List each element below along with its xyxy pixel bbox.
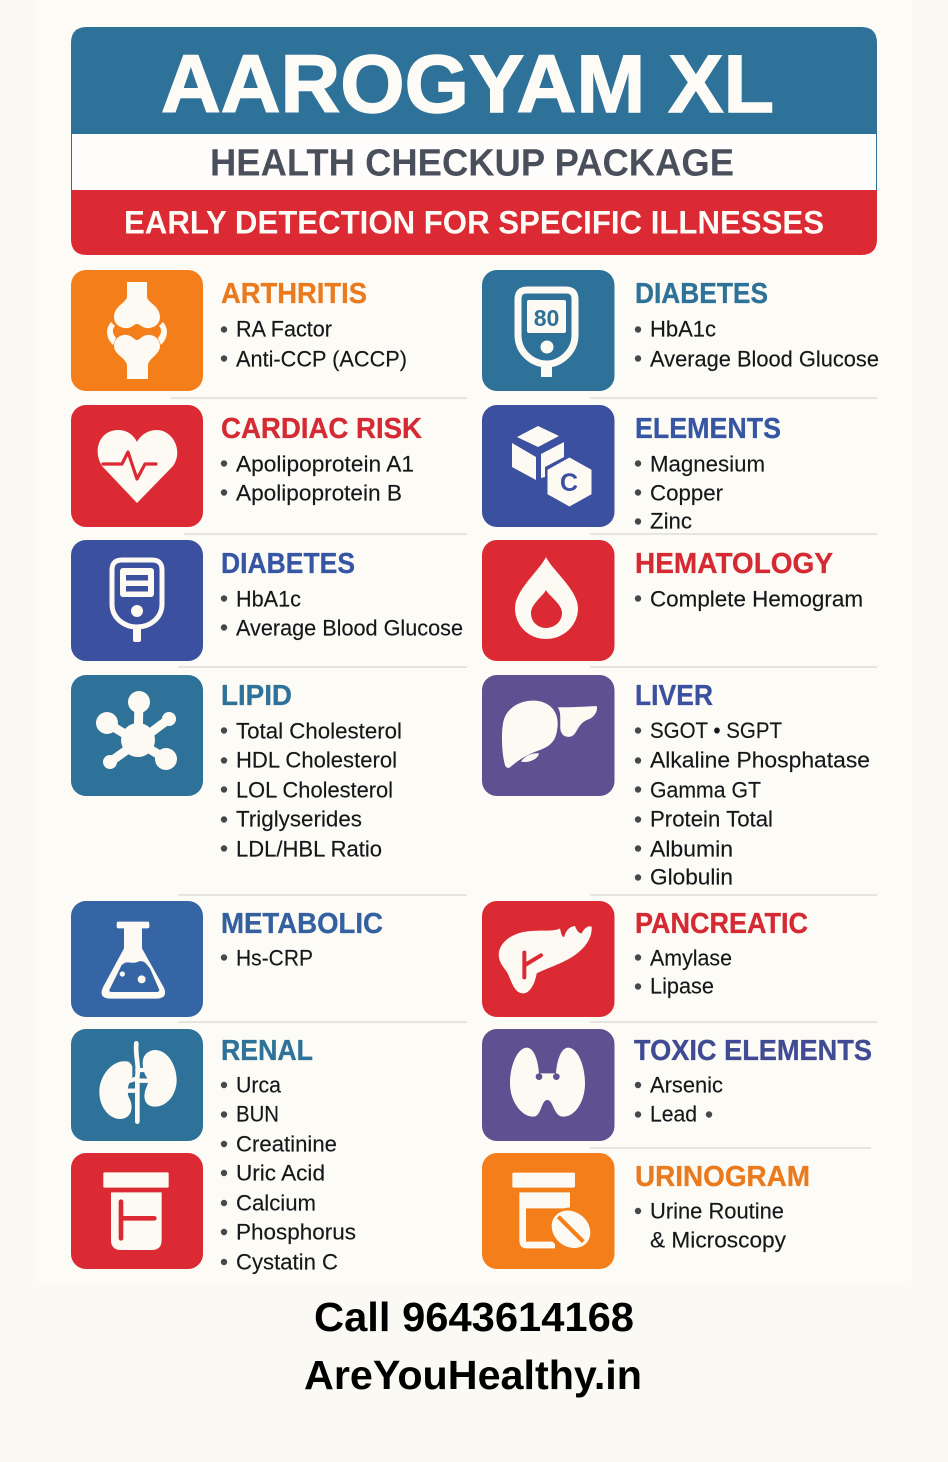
- test list: [635, 316, 879, 372]
- test list: Total Cholesterol: [236, 718, 402, 744]
- panel: diabetes left: [71, 540, 463, 661]
- panel: metabolic: [71, 901, 383, 1017]
- heading: LIPID: [221, 680, 292, 712]
- subtitle: HEALTH CHECKUP PACKAGE: [210, 142, 734, 184]
- icon: pancreas: [482, 901, 614, 1017]
- icon: specimen cup: [71, 1153, 203, 1269]
- panel: cardiac risk: [71, 405, 422, 527]
- panel: elements: [482, 405, 781, 534]
- test list: [221, 452, 414, 506]
- test list: BUN: [236, 1102, 279, 1126]
- test list: Gamma GT: [650, 778, 761, 802]
- test list: [635, 718, 870, 890]
- test list: Lead: [650, 1102, 697, 1126]
- tagline: EARLY DETECTION FOR SPECIFIC ILLNESSES: [124, 204, 824, 240]
- heading: HEMATOLOGY: [635, 548, 833, 580]
- test list: Hs-CRP: [236, 946, 313, 970]
- test list: Alkaline Phosphatase: [650, 748, 870, 772]
- heading: LIVER: [635, 680, 713, 712]
- panel: pancreatic: [482, 901, 808, 1017]
- website: AreYouHealthy.in: [304, 1352, 642, 1398]
- heading: PANCREATIC: [635, 908, 808, 940]
- heading: TOXIC ELEMENTS: [634, 1035, 872, 1067]
- icon: cube and hexagon: [482, 405, 614, 527]
- test list: Copper: [650, 480, 724, 506]
- test list: Cystatin C: [236, 1250, 338, 1274]
- heading: ARTHRITIS: [221, 278, 367, 310]
- icon: cube and hexagon: C: [560, 469, 578, 497]
- test list: Lipase: [650, 974, 714, 998]
- test list: [635, 946, 732, 998]
- heading: RENAL: [221, 1035, 313, 1067]
- test list: Albumin: [650, 836, 733, 862]
- test list: Urine Routine: [650, 1198, 784, 1224]
- panel: arthritis: [71, 270, 407, 391]
- test list: [635, 1072, 723, 1126]
- icon: molecule: [71, 675, 203, 796]
- test list: Complete Hemogram: [650, 586, 863, 612]
- test list: [221, 718, 402, 862]
- test list: Anti-CCP (ACCP): [236, 346, 407, 372]
- test list: LOL Cholesterol: [236, 778, 393, 802]
- test list: LDL/HBL Ratio: [236, 836, 382, 862]
- panel: hematology: [482, 540, 863, 661]
- panel: diabetes right: [482, 270, 879, 391]
- test list: Uric Acid: [236, 1160, 325, 1186]
- test list: Protein Total: [650, 806, 773, 832]
- icon: knee joint: [71, 270, 203, 391]
- panel: toxic elements: [482, 1029, 872, 1141]
- icon: blood drop: [482, 540, 614, 661]
- test list: Arsenic: [650, 1072, 723, 1098]
- icon: glucose meter with reading: 80: [534, 305, 559, 331]
- test list: Globulin: [650, 864, 733, 890]
- panel: renal: [71, 1029, 356, 1274]
- icon: thyroid: [482, 1029, 614, 1141]
- header banner: [71, 27, 877, 255]
- test list: Magnesium: [650, 452, 765, 476]
- test list: Apolipoprotein B: [236, 480, 402, 506]
- test list: Phosphorus: [236, 1220, 356, 1244]
- icon: flask: [71, 901, 203, 1017]
- title: AAROGYAM XL: [161, 39, 774, 130]
- test list: Average Blood Glucose: [650, 346, 879, 372]
- heading: ELEMENTS: [635, 413, 781, 445]
- icon: glucose meter: [71, 540, 203, 661]
- test list: HbA1c: [236, 586, 301, 612]
- test list: Zinc: [650, 508, 692, 534]
- test list: Triglyserides: [236, 806, 362, 832]
- test list: RA Factor: [236, 316, 332, 342]
- test list: Amylase: [650, 946, 732, 970]
- heading: URINOGRAM: [635, 1161, 810, 1193]
- icon: kidneys: [71, 1029, 203, 1141]
- test list: Apolipoprotein A1: [236, 452, 414, 476]
- test list: [221, 316, 407, 372]
- panel: liver: [482, 675, 870, 890]
- test list: HbA1c: [650, 316, 716, 342]
- heading: DIABETES: [221, 548, 355, 580]
- panel: lipid: [71, 675, 402, 862]
- test list: Urca: [236, 1072, 281, 1098]
- icon: heart with pulse: [71, 405, 203, 527]
- footer contact: [304, 1294, 642, 1398]
- test list: SGOT • SGPT: [650, 718, 782, 743]
- panel: urinogram: [482, 1153, 810, 1269]
- test list: Average Blood Glucose: [236, 616, 463, 640]
- test list: & Microscopy: [650, 1228, 787, 1252]
- heading: CARDIAC RISK: [221, 413, 422, 445]
- test list: HDL Cholesterol: [236, 748, 397, 772]
- icon: jar and pill: [482, 1153, 614, 1269]
- icon: glucose meter with reading: [482, 270, 614, 391]
- test list: [635, 452, 765, 534]
- test list: [221, 586, 463, 640]
- test list: Calcium: [236, 1190, 316, 1216]
- heading: DIABETES: [635, 278, 768, 310]
- phone number: Call 9643614168: [314, 1294, 634, 1340]
- heading: METABOLIC: [221, 908, 383, 940]
- test list: Creatinine: [236, 1132, 337, 1156]
- test list: [635, 1198, 787, 1252]
- icon: liver: [482, 675, 614, 796]
- test list: [221, 1072, 356, 1274]
